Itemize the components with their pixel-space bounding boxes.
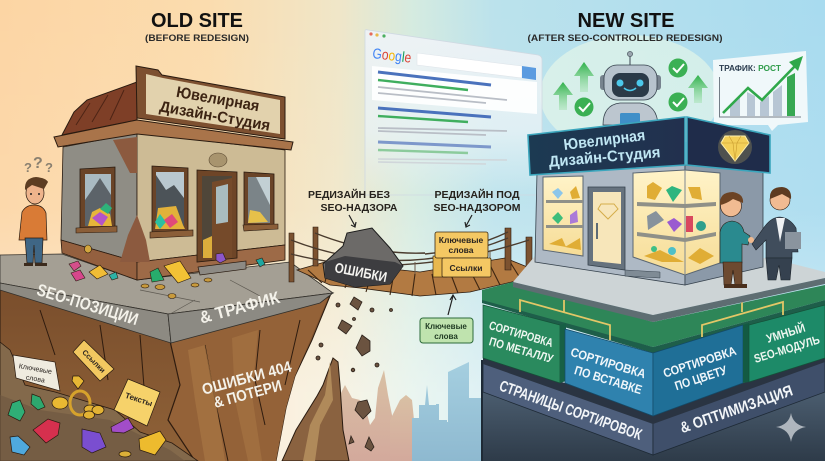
shop sign text: Дизайн-Студия [548, 144, 661, 171]
plank: keywords [433, 232, 488, 277]
slab label: traffic: & ТРАФИК [198, 288, 282, 327]
door [588, 187, 625, 270]
client in teal sweater [720, 192, 750, 288]
left wall [61, 133, 137, 262]
bridge posts [289, 227, 532, 282]
ropes [291, 232, 529, 265]
old shop building [54, 66, 293, 280]
title: old site: OLD SITE [151, 9, 243, 32]
robot [600, 51, 661, 125]
confused man: ? [33, 155, 43, 172]
plank: keywords: Ключевые [439, 235, 483, 245]
cliff label: errors and losses: & ПОТЕРИ [212, 377, 284, 412]
shop step [625, 270, 660, 278]
icon: glowing diamond [718, 130, 752, 164]
left cliff [0, 288, 330, 461]
bridge label: with seo [434, 188, 521, 214]
shop sign text [548, 127, 661, 171]
slab label: seo positions: SEO-ПОЗИЦИИ [35, 280, 141, 329]
block: sort by stone: СОРТИРОВКА [569, 345, 648, 381]
block: smart seo module [743, 305, 825, 383]
bridge label: with seo: SEO-НАДЗОРОМ [434, 202, 521, 214]
block: sort by stone: ПО ВСТАВКЕ [573, 363, 644, 397]
rope bridge [289, 227, 532, 296]
plank: links: Ссылки [450, 263, 482, 273]
wall base [61, 240, 137, 280]
right wall [685, 165, 763, 285]
sign text [158, 84, 271, 135]
new shop [528, 117, 770, 285]
plank: keywords: слова [448, 245, 474, 255]
title: new site: NEW SITE [578, 9, 674, 32]
new platform green deck and wires [482, 282, 825, 353]
left wall [535, 165, 685, 285]
browser window: google results [365, 30, 542, 195]
green tag: keywords: слова [434, 332, 458, 341]
sign text: Дизайн-Студия [158, 98, 271, 135]
cornice [54, 120, 293, 150]
buried note: keywords [13, 355, 60, 391]
band [483, 363, 653, 455]
check badges [574, 58, 688, 116]
confused man [19, 155, 53, 266]
block: sort by metal: СОРТИРОВКА [487, 318, 555, 350]
arrow: to bridge planks [465, 215, 472, 227]
left window [543, 176, 583, 256]
shop sign left [528, 117, 685, 175]
block: sort by color: ПО ЦВЕТУ [673, 363, 729, 393]
emblem [209, 153, 227, 167]
green tag: keywords [420, 318, 473, 343]
block: sort by metal: ПО МЕТАЛЛУ [487, 334, 555, 366]
rock spire [282, 358, 349, 461]
chart heading: ТРАФИК: РОСТ [719, 64, 781, 73]
traffic chart card [713, 51, 808, 131]
buried note: texts [114, 379, 160, 426]
green up arrows [553, 62, 708, 110]
shop sign right [687, 117, 770, 173]
display window [633, 170, 720, 275]
falling rocks [316, 297, 392, 451]
boulder with errors [323, 228, 403, 287]
door [197, 170, 237, 262]
boulder with errors: ОШИБКИ [333, 259, 388, 285]
confused man: ? [24, 160, 32, 175]
right wall [137, 133, 285, 262]
platform: old site [0, 254, 333, 343]
block: sort by color [653, 325, 743, 416]
bridge label: without seo: РЕДИЗАЙН БЕЗ [308, 188, 390, 201]
block: smart seo module: УМНЫЙ [764, 320, 807, 346]
consultant in suit [748, 187, 801, 280]
dirt mound [0, 342, 198, 461]
block: sort by stone [565, 329, 653, 416]
signboard [136, 66, 285, 139]
sign text: Ювелирная [175, 84, 261, 115]
title: old site: (BEFORE REDESIGN) [145, 33, 249, 44]
buried note: texts: Тексты [124, 391, 154, 408]
green tag: keywords: Ключевые [425, 322, 467, 331]
band label: optimisation: & ОПТИМИЗАЦИЯ [678, 382, 795, 437]
bridge label: with seo: РЕДИЗАЙН ПОД [434, 188, 520, 201]
google logo: Google [372, 46, 412, 67]
buried note: keywords: Ключевые [18, 363, 52, 376]
plank: links [442, 258, 491, 277]
arrow: from green tag to bridge [448, 295, 456, 315]
trend line [723, 65, 796, 113]
window: middle [150, 166, 193, 238]
chart bars [730, 85, 782, 116]
window: left [76, 167, 117, 233]
title: old site [145, 9, 249, 44]
confused man: ? [45, 160, 53, 175]
door step [198, 261, 246, 275]
title: new site: (AFTER SEO-CONTROLLED REDESIGN) [528, 33, 722, 44]
buried gems and ring [8, 376, 166, 457]
cliff label: errors and losses [200, 358, 294, 412]
distant city skyline [340, 362, 482, 461]
shop sign text: Ювелирная [563, 127, 646, 154]
new platform top [513, 256, 825, 322]
block: sort by metal [483, 305, 566, 383]
buried note: links: Ссылки [80, 348, 107, 375]
band label: sort pages: СТРАНИЦЫ СОРТИРОВОК [497, 378, 644, 444]
bridge label: without seo: SEO-НАДЗОРА [320, 202, 398, 214]
bridge deck [297, 258, 530, 296]
title: new site [528, 9, 722, 44]
roof [62, 82, 137, 135]
buried note: links [73, 340, 114, 381]
arrow: to boulder [349, 215, 356, 227]
buried note: keywords: слова [25, 374, 45, 385]
sparkle icon [776, 413, 806, 442]
wall crack [113, 137, 137, 173]
gems on platform [69, 245, 265, 298]
window: right [243, 172, 278, 231]
bridge label: without seo [308, 188, 398, 214]
new site foundation [481, 358, 825, 461]
block: sort by color: СОРТИРОВКА [661, 344, 738, 381]
cliff label: errors and losses: ОШИБКИ 404 [200, 358, 294, 399]
